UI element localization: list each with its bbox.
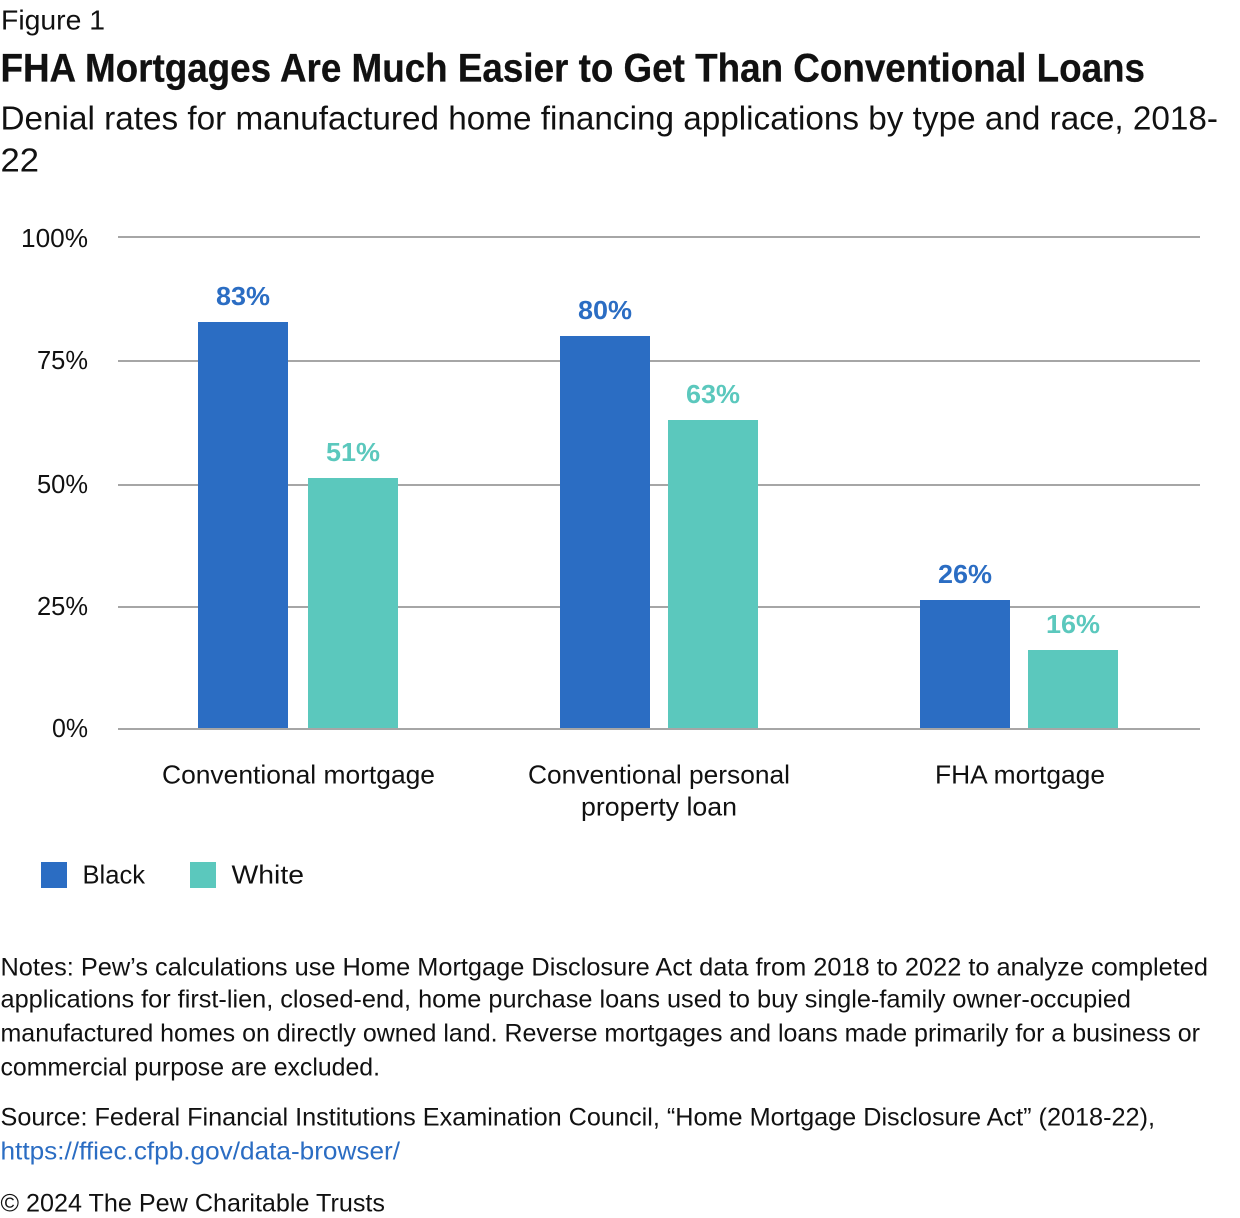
source: https://ffiec.cfpb.gov/data-browser/ <box>0 1138 400 1166</box>
figure label: Figure 1 <box>1 4 105 36</box>
y-axis labels: 50% <box>37 469 88 499</box>
legend: Black <box>82 860 146 890</box>
bars: FHA mortgage: 16% <box>1046 609 1100 639</box>
y-axis labels: 25% <box>37 591 88 621</box>
category labels: Conventional personal <box>528 760 790 790</box>
copyright: © 2024 The Pew Charitable Trusts <box>0 1190 385 1218</box>
source <box>0 1104 1155 1166</box>
category labels <box>162 760 1105 822</box>
notes: manufactured homes on directly owned land. Reverse mortgages and loans made primarily for a business or <box>0 1020 1200 1048</box>
legend <box>41 860 304 890</box>
bar chart <box>21 223 1200 822</box>
y-axis labels: 75% <box>37 345 88 375</box>
category labels: property loan <box>581 792 737 822</box>
title: FHA Mortgages Are Much Easier to Get Than Conventional Loans <box>0 46 1145 90</box>
y-axis labels: 0% <box>52 713 88 743</box>
notes: commercial purpose are excluded. <box>0 1054 380 1082</box>
bars: FHA mortgage <box>920 559 1118 728</box>
legend: White <box>232 860 304 890</box>
notes: Notes: Pew’s calculations use Home Mortgage Disclosure Act data from 2018 to 2022 to analyze completed <box>0 954 1208 982</box>
subtitle: 22 <box>0 142 39 178</box>
grid lines <box>118 236 1200 730</box>
bars: FHA mortgage: 26% <box>938 559 992 589</box>
y-axis labels <box>21 223 88 743</box>
bars: conventional mortgage <box>198 281 398 728</box>
category labels: FHA mortgage <box>935 760 1105 790</box>
bars: conventional personal property loan: 80% <box>578 295 632 325</box>
bars: conventional mortgage: 51% <box>326 437 380 467</box>
notes <box>0 954 1208 1082</box>
notes: applications for first-lien, closed-end, home purchase loans used to buy single-family owner-occupied <box>0 986 1131 1014</box>
bars: conventional personal property loan: 63% <box>686 379 740 409</box>
subtitle <box>0 100 1218 178</box>
bars: conventional personal property loan <box>560 295 758 728</box>
category labels: Conventional mortgage <box>162 760 435 790</box>
bars: conventional mortgage: 83% <box>216 281 270 311</box>
subtitle: Denial rates for manufactured home financing applications by type and race, 2018- <box>0 100 1218 136</box>
y-axis labels: 100% <box>21 223 88 253</box>
source: Source: Federal Financial Institutions Examination Council, “Home Mortgage Disclosure Act” (2018-22), <box>0 1104 1155 1132</box>
